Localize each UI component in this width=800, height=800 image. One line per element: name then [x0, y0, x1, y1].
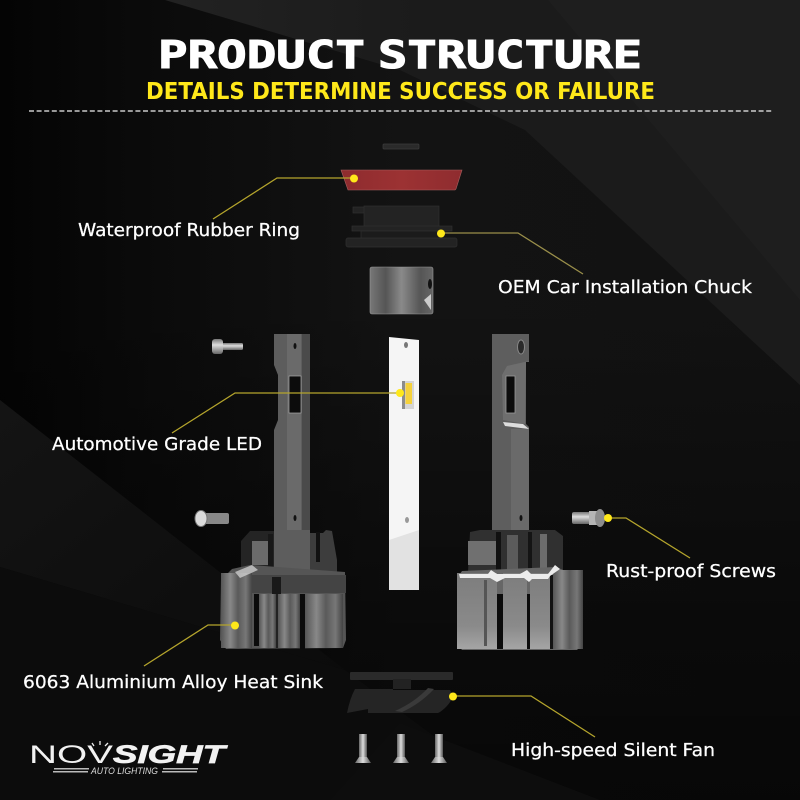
part: metal sleeve	[370, 267, 433, 314]
callout: OEM car installation chuck: OEM Car Installation Chuck	[498, 277, 753, 298]
callout: heat sink	[23, 622, 324, 693]
callout: waterproof rubber ring	[78, 174, 358, 241]
bottom screw 1	[355, 734, 371, 763]
part: top screw	[212, 339, 243, 354]
right fin block	[457, 565, 583, 650]
part: top clip	[383, 144, 419, 149]
part: bottom screws	[355, 734, 447, 763]
callout: rust-proof screws	[604, 514, 776, 582]
subtitle: DETAILS DETERMINE SUCCESS OR FAILURE	[146, 79, 655, 105]
right stem	[492, 334, 530, 532]
part: silent fan	[347, 672, 453, 713]
part: right heat sink	[457, 334, 583, 650]
LED chip	[402, 381, 414, 409]
bottom screw 2	[393, 734, 409, 763]
callout: automotive grade LED: Automotive Grade LED	[52, 434, 262, 455]
title	[158, 33, 642, 78]
callout: automotive grade LED	[52, 389, 404, 455]
part: left heat sink	[220, 334, 346, 649]
header divider	[29, 110, 773, 112]
callout: waterproof rubber ring: Waterproof Rubber Ring	[78, 220, 300, 241]
part: waterproof rubber ring	[341, 170, 462, 190]
part: middle-left screw	[195, 510, 229, 526]
callout: high-speed silent fan	[449, 692, 715, 761]
part: OEM car installation chuck	[346, 206, 457, 247]
logo: Novsight: AUTO LIGHTING	[90, 766, 158, 776]
callout: rust-proof screws: Rust-proof Screws	[606, 561, 776, 582]
title: STRUCTURE	[378, 33, 642, 78]
title: PRODUCT	[158, 33, 365, 78]
right upper collar	[468, 530, 563, 594]
part: LED circuit board	[389, 337, 419, 590]
part: right screw	[572, 509, 605, 527]
logo: Novsight: SIGHT	[113, 741, 229, 769]
left upper collar	[241, 530, 337, 575]
left stem	[274, 334, 310, 535]
callout: heat sink: 6063 Aluminium Alloy Heat Sink	[23, 672, 324, 693]
left fin block	[220, 565, 346, 649]
logo: Novsight	[29, 741, 229, 776]
bottom screw 3	[431, 734, 447, 763]
logo: Novsight: NOV	[29, 741, 113, 769]
callout: high-speed silent fan: High-speed Silent Fan	[511, 740, 715, 761]
callout: OEM car installation chuck	[437, 230, 753, 298]
